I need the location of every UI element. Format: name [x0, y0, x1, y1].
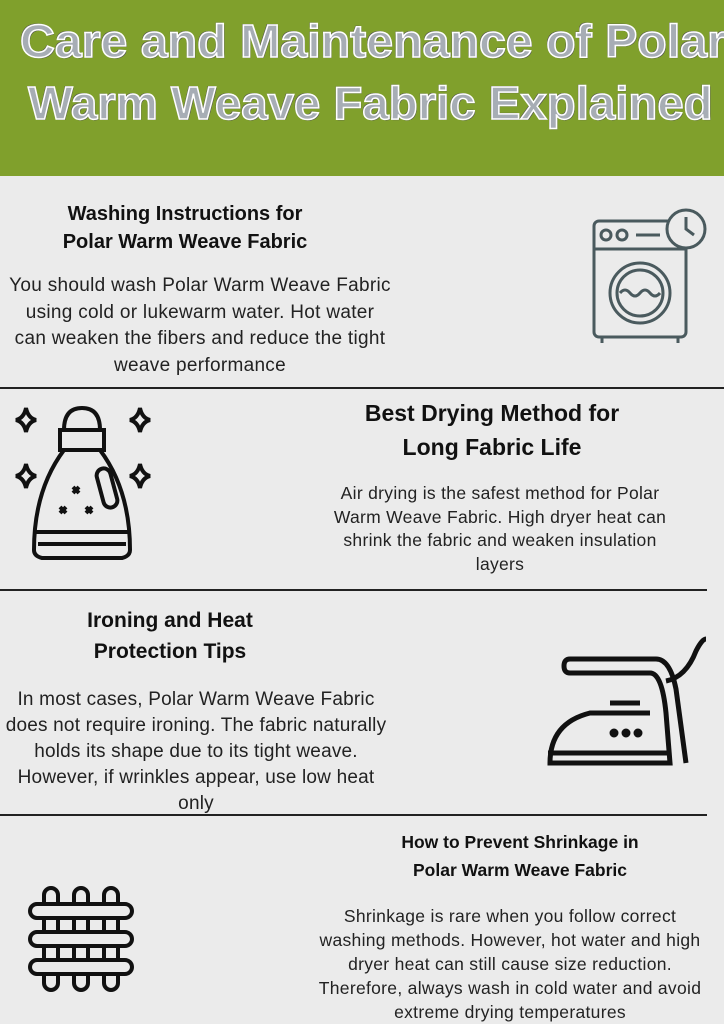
heading: washing: Washing Instructions for: [68, 203, 302, 225]
panel: shrinkage: [28, 832, 701, 1022]
text: washing: using cold or lukewarm water. Hot water: [26, 302, 374, 322]
text: ironing: does not require ironing. The fabric naturally: [6, 715, 386, 736]
text: shrinkage: dryer heat can still cause size reduction.: [348, 954, 672, 974]
icon: iron: [548, 636, 706, 766]
text: ironing: In most cases, Polar Warm Weave Fabric: [17, 689, 375, 710]
heading: drying: [365, 400, 619, 460]
text: ironing: only: [178, 793, 214, 814]
text: washing: You should wash Polar Warm Weave Fabric: [9, 275, 391, 296]
text: ironing: holds its shape due to its tight weave.: [34, 741, 358, 762]
text: ironing: [6, 689, 386, 814]
icon: detergent bottle with sparkles: [16, 406, 150, 560]
icon: weave: [28, 886, 134, 992]
text: drying: Warm Weave Fabric. High dryer heat can: [334, 506, 666, 526]
text: ironing: However, if wrinkles appear, use low heat: [18, 767, 374, 788]
heading: ironing: Ironing and Heat: [87, 609, 253, 632]
text: shrinkage: Shrinkage is rare when you follow correct: [344, 906, 676, 926]
heading: shrinkage: [401, 832, 639, 880]
title banner: Warm Weave Fabric Explained: [28, 77, 713, 129]
panel: washing: [9, 203, 706, 376]
text: shrinkage: washing methods. However, hot water and high: [320, 930, 700, 950]
heading: shrinkage: Polar Warm Weave Fabric: [413, 860, 627, 880]
text: drying: shrink the fabric and weaken insulation: [343, 530, 657, 550]
text: drying: Air drying is the safest method for Polar: [341, 483, 659, 503]
text: shrinkage: extreme drying temperatures: [394, 1002, 626, 1022]
icon: washing machine: [592, 208, 706, 343]
title banner: [0, 0, 724, 176]
text: drying: [334, 483, 666, 574]
text: washing: weave performance: [114, 354, 286, 376]
text: washing: can weaken the fibers and reduce the tight: [15, 328, 385, 349]
heading: washing: [63, 203, 307, 253]
text: drying: layers: [476, 554, 524, 574]
heading: drying: Best Drying Method for: [365, 400, 619, 426]
text: shrinkage: [319, 906, 701, 1022]
heading: shrinkage: How to Prevent Shrinkage in: [401, 832, 639, 852]
heading: ironing: Protection Tips: [94, 640, 246, 663]
heading: drying: Long Fabric Life: [403, 434, 581, 460]
text: washing: [9, 275, 391, 376]
panel: drying: [16, 400, 666, 574]
heading: washing: Polar Warm Weave Fabric: [63, 231, 307, 253]
heading: ironing: [87, 609, 253, 663]
title banner: Care and Maintenance of Polar: [20, 15, 724, 67]
text: shrinkage: Therefore, always wash in cold water and avoid: [319, 978, 701, 998]
panel: ironing: [6, 609, 706, 814]
